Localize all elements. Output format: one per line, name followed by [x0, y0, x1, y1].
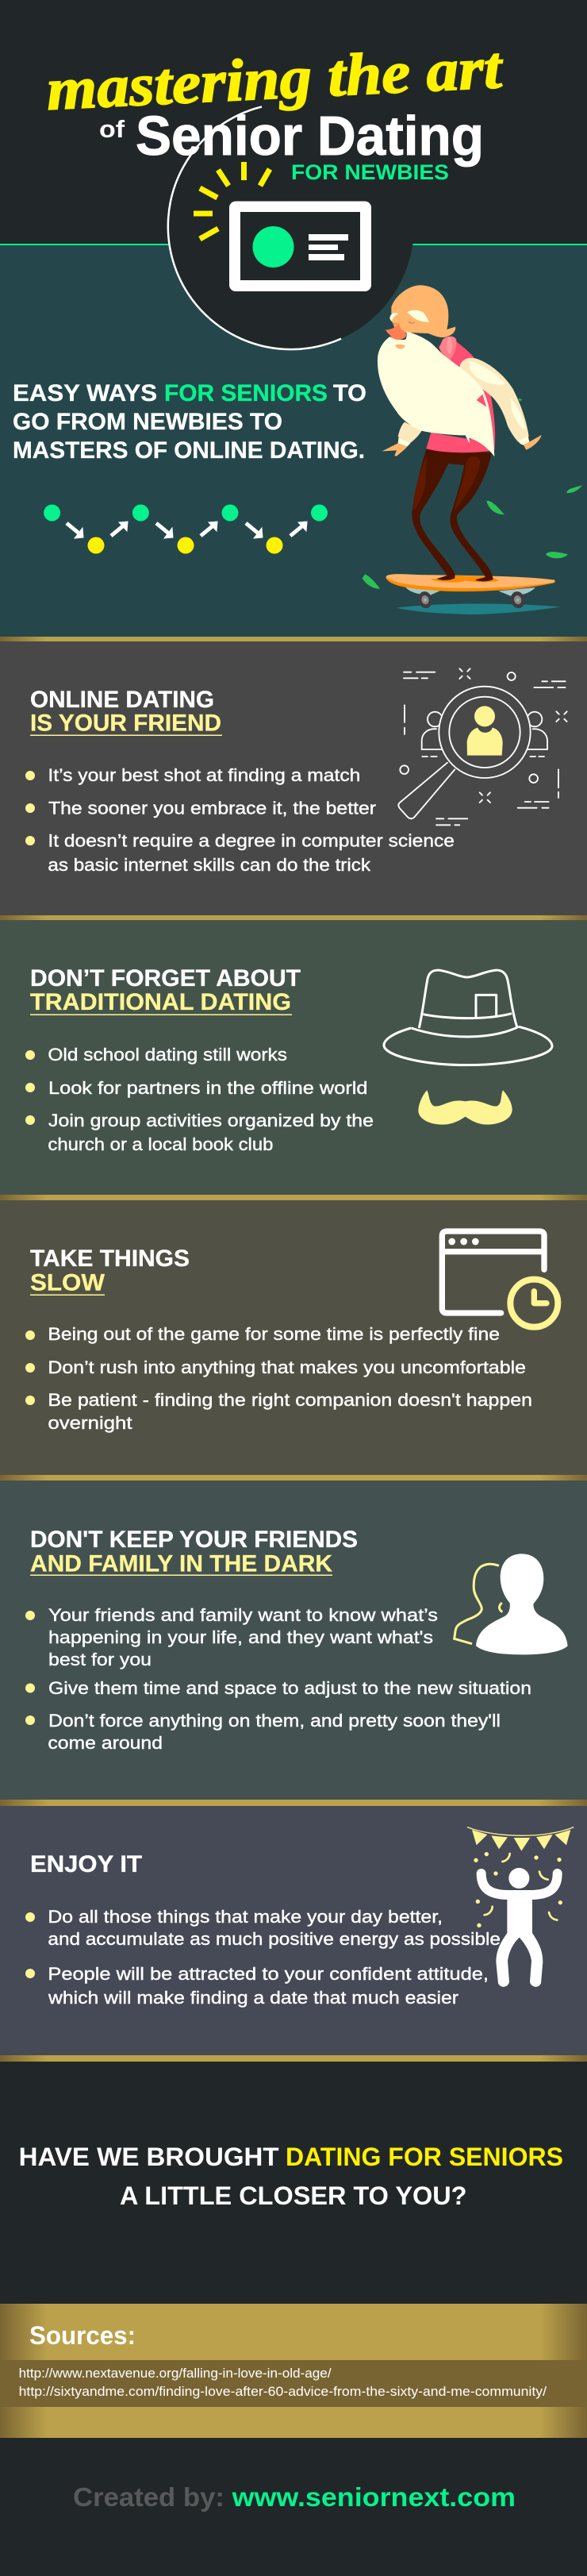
bullet list: come around: [48, 1733, 163, 1753]
sources heading: Sources:: [29, 2321, 136, 2350]
icon: two silhouettes: [455, 1554, 568, 1654]
bullet list: Do all those things that make your day better,: [48, 1907, 443, 1927]
title: of: of: [99, 115, 125, 143]
heading: ONLINE DATING: [30, 687, 214, 713]
closing question: A LITTLE CLOSER TO YOU?: [120, 2181, 466, 2210]
closing question: HAVE WE BROUGHT: [19, 2143, 279, 2171]
bullet list: [25, 1605, 531, 1753]
illustration: skateboard and legs: [363, 449, 582, 614]
bullet list: Don’t rush into anything that makes you uncomfortable: [48, 1357, 526, 1377]
bullet list: Be patient - finding the right companion doesn't happen: [48, 1390, 532, 1410]
bullet list: [25, 1324, 532, 1433]
title: for newbies: FOR NEWBIES: [291, 160, 449, 184]
subtitle text: MASTERS OF ONLINE DATING.: [13, 437, 365, 464]
bullet list: overnight: [48, 1413, 132, 1433]
gold divider: [0, 1800, 587, 1806]
bullet list: [25, 765, 455, 875]
gold divider: [0, 915, 587, 920]
heading: TRADITIONAL DATING: [30, 989, 291, 1015]
bullet list: People will be attracted to your confident attitude,: [48, 1964, 489, 1984]
panel: hero: [0, 35, 587, 637]
closing question: [19, 2143, 563, 2210]
bullet list: as basic internet skills can do the trick: [48, 855, 371, 875]
title: Senior Dating: Senior Dating: [136, 105, 484, 167]
heading: [30, 1527, 358, 1577]
source links: http://sixtyandme.com/finding-love-after-60-advice-from-the-sixty-and-me-community/: [19, 2384, 547, 2399]
heading: DON'T KEEP YOUR FRIENDS: [30, 1527, 358, 1553]
icon: attention rays: [194, 162, 270, 239]
closing question: DATING FOR SENIORS: [286, 2143, 563, 2171]
zigzag of dots and arrows: [44, 505, 328, 554]
subtitle text: TO: [333, 380, 366, 406]
bullet list: [25, 1907, 501, 2008]
bullet list: best for you: [48, 1650, 152, 1669]
bullet list: It doesn’t require a degree in computer science: [48, 830, 455, 851]
panel: sources: [0, 2304, 587, 2438]
subtitle text: GO FROM NEWBIES TO: [13, 409, 282, 435]
panel: enjoy it: [0, 1806, 587, 2055]
heading: [30, 965, 301, 1015]
icon: celebrating figure: [467, 1827, 574, 1987]
heading: ENJOY IT: [30, 1851, 142, 1877]
bullet list: Give them time and space to adjust to the new situation: [48, 1678, 531, 1698]
source links: [19, 2366, 547, 2399]
bullet list: which will make finding a date that much easier: [48, 1988, 458, 2008]
heading: [30, 687, 222, 737]
heading: TAKE THINGS: [30, 1246, 190, 1272]
bullet list: happening in your life, and they want what's: [48, 1627, 433, 1647]
bullet list: [25, 1045, 374, 1154]
icon: hat and moustache: [384, 970, 552, 1125]
bullet list: Look for partners in the offline world: [48, 1078, 368, 1098]
credit line: www.seniornext.com: [232, 2482, 516, 2512]
bullet list: Join group activities organized by the: [48, 1111, 374, 1130]
panel: traditional dating: [0, 920, 587, 1195]
bullet list: Don’t force anything on them, and pretty soon they'll: [48, 1711, 501, 1731]
panel: take things slow: [0, 1200, 587, 1475]
subtitle text: EASY WAYS: [13, 380, 157, 406]
subtitle text: [13, 380, 366, 464]
heading: SLOW: [30, 1270, 106, 1296]
panel: friends and family: [0, 1481, 587, 1800]
credit line: [73, 2482, 516, 2512]
title: mastering the art: mastering the art: [45, 35, 505, 123]
icon: profile card: [229, 202, 371, 291]
bullet list: church or a local book club: [48, 1134, 273, 1154]
heading: DON’T FORGET ABOUT: [30, 965, 301, 992]
heading: [30, 1246, 190, 1296]
bullet list: Your friends and family want to know what’s: [48, 1605, 438, 1625]
bullet list: It’s your best shot at finding a match: [48, 765, 360, 785]
gold divider: [0, 1195, 587, 1200]
heading: AND FAMILY IN THE DARK: [30, 1551, 332, 1577]
subtitle text: FOR SENIORS: [164, 380, 328, 406]
icon: browser window with clock: [442, 1231, 558, 1327]
gold divider: [0, 1475, 587, 1481]
heading: IS YOUR FRIEND: [30, 710, 221, 737]
bullet list: The sooner you embrace it, the better: [48, 799, 376, 818]
bullet list: and accumulate as much positive energy as possible: [48, 1929, 501, 1949]
gold divider: [0, 637, 587, 641]
illustration: old man upper body: [378, 285, 542, 456]
source links: http://www.nextavenue.org/falling-in-love-in-old-age/: [19, 2366, 332, 2381]
badge circle: [168, 103, 414, 349]
panel: online dating: [0, 641, 587, 915]
gold divider: [0, 2055, 587, 2062]
bullet list: Being out of the game for some time is perfectly fine: [48, 1324, 500, 1344]
icon: magnifier with people: [398, 668, 567, 825]
credit line: Created by:: [73, 2482, 224, 2512]
bullet list: Old school dating still works: [48, 1045, 287, 1065]
